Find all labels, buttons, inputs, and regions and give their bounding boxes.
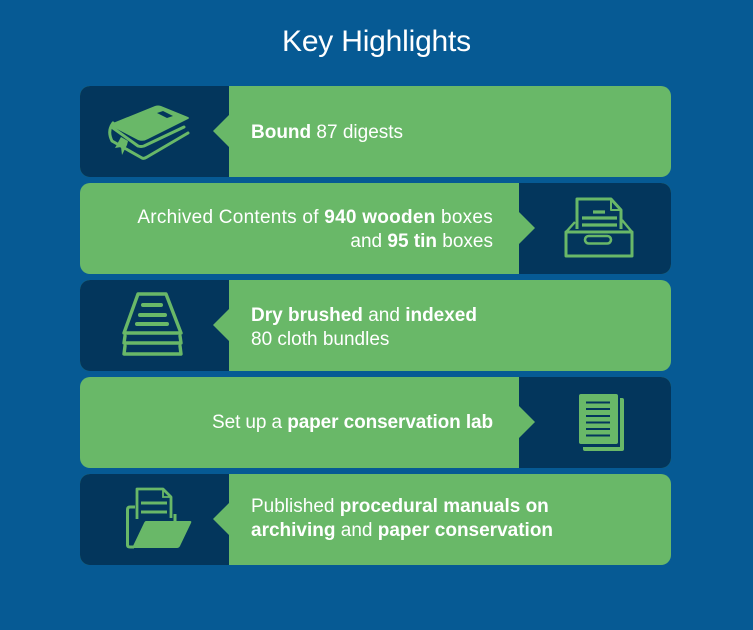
text: row 1: Bound 87 digests xyxy=(251,122,403,143)
text: row 3: 80 cloth bundles xyxy=(251,329,389,350)
icon: file drawer xyxy=(566,199,632,256)
panel: row 1 xyxy=(80,86,671,177)
text: row 4: Set up a paper conservation lab xyxy=(212,412,493,433)
panel: row 3 xyxy=(80,280,671,371)
text: row 5: archiving and paper conservation xyxy=(251,520,553,541)
text: row 3: Dry brushed and indexed xyxy=(251,305,477,326)
panel: row 5 xyxy=(80,474,671,565)
icon: book xyxy=(110,106,189,158)
panel: row 2 xyxy=(80,183,671,274)
icon: stack of cloth bundles xyxy=(124,294,181,354)
icon: paper documents xyxy=(579,394,624,451)
panel: row 4 xyxy=(80,377,671,468)
icon: open folder with paper xyxy=(128,489,191,548)
text: row 2: and 95 tin boxes xyxy=(350,231,493,252)
text: row 5 xyxy=(251,496,553,541)
title: Key Highlights xyxy=(282,25,471,58)
text: row 2 xyxy=(137,207,493,252)
text: row 3 xyxy=(251,305,477,350)
text: row 2: Archived Contents of 940 wooden boxes xyxy=(137,207,493,228)
text: row 5: Published procedural manuals on xyxy=(251,496,549,517)
